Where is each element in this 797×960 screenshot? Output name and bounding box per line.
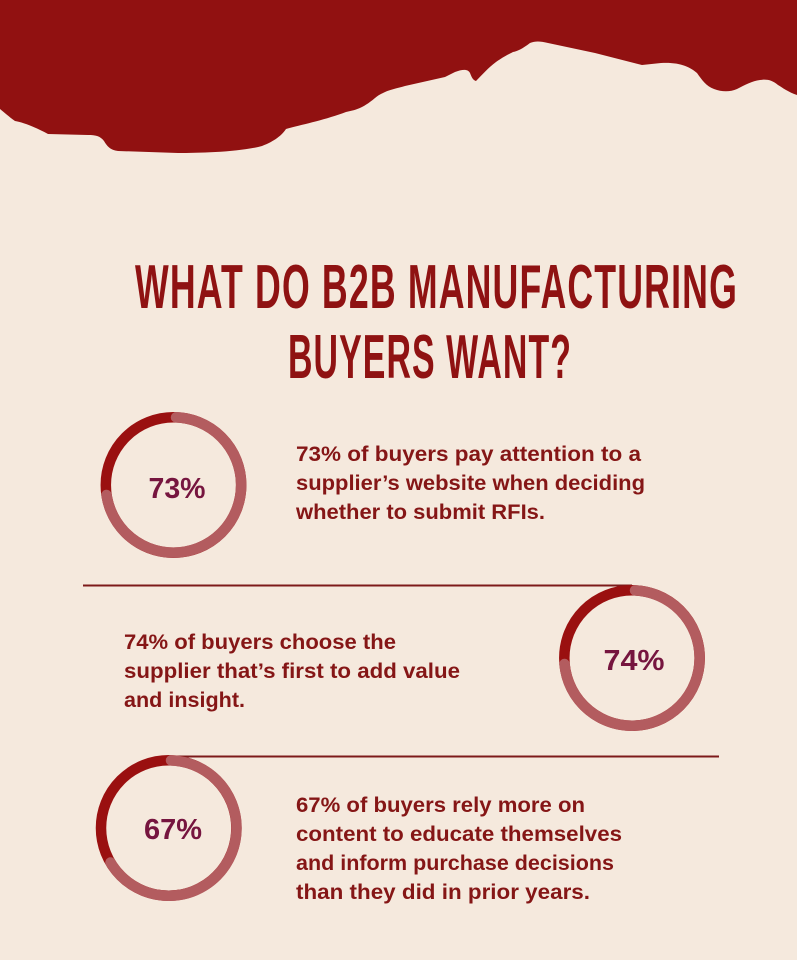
ring chart: 67% xyxy=(101,760,236,896)
text: 74% of buyers xyxy=(124,631,460,712)
ring chart: 73% xyxy=(106,417,241,553)
text: 73% of buyers xyxy=(295,443,645,524)
text: 67% of buyers: content to educate themselves xyxy=(296,823,622,846)
text: 67% of buyers: 67% of buyers rely more on xyxy=(296,794,585,817)
ring chart: 74%: 74% xyxy=(604,645,665,677)
text: 67% of buyers: and inform purchase decisions xyxy=(296,852,614,875)
ring chart: 73%: 73% xyxy=(148,473,206,505)
text: 73% of buyers: supplier’s website when deciding xyxy=(296,472,645,495)
text: 73% of buyers: 73% of buyers pay attention to a xyxy=(296,443,641,466)
text: 73% of buyers: whether to submit RFIs. xyxy=(295,501,545,524)
header: torn red shape xyxy=(0,0,797,153)
ring chart: 67%: 67% xyxy=(144,814,202,846)
ring chart: 74% xyxy=(564,590,700,726)
divider line bottom xyxy=(170,756,719,758)
text: 74% of buyers: and insight. xyxy=(124,689,245,712)
title xyxy=(135,253,738,392)
text: 74% of buyers: 74% of buyers choose the xyxy=(124,631,396,654)
text: 74% of buyers: supplier that’s first to add value xyxy=(124,660,460,683)
text: 67% of buyers xyxy=(296,794,622,904)
divider line top xyxy=(83,584,632,586)
text: 67% of buyers: than they did in prior years. xyxy=(296,881,590,904)
title: BUYERS WANT? xyxy=(288,323,572,392)
